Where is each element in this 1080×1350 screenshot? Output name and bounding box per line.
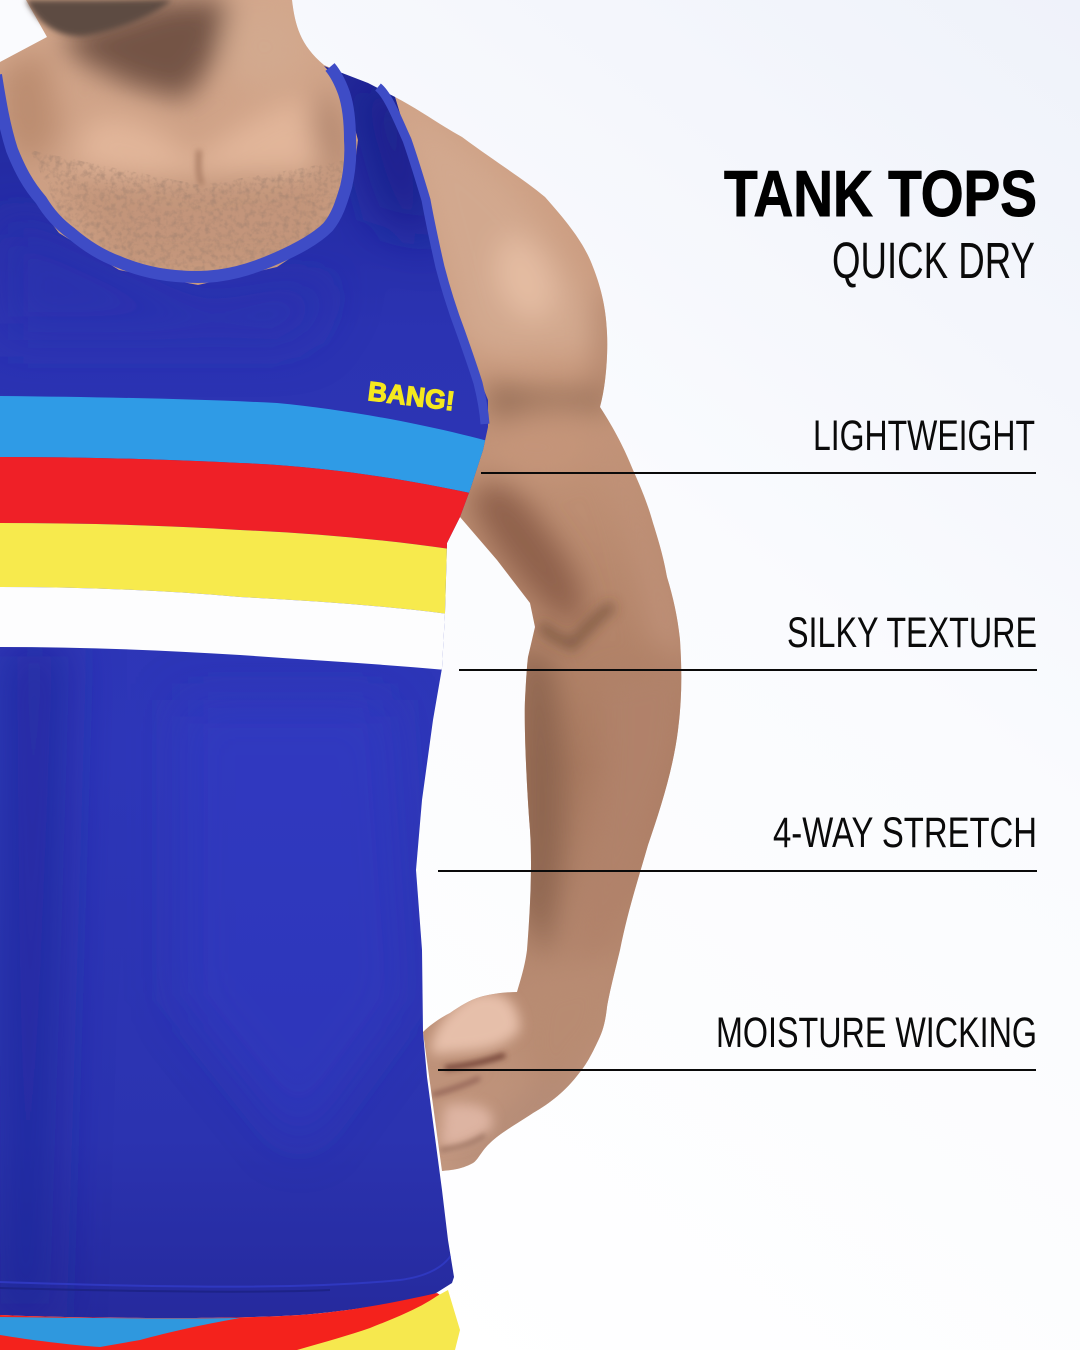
figure: man wearing tank top [0, 0, 700, 1350]
stripe: white [0, 587, 448, 670]
hem stitching [0, 1254, 452, 1287]
stripe: yellow [0, 523, 450, 614]
tank top body [0, 50, 520, 1330]
logo: BANG!: BANG! [366, 376, 456, 417]
skin: neck, chest, shoulder and arm [0, 0, 700, 1180]
beard [26, 0, 172, 36]
shorts [0, 1290, 460, 1350]
stripe: sky blue [0, 396, 495, 493]
stripe: red [0, 457, 470, 549]
strap trim [378, 87, 485, 424]
chest hair [32, 151, 344, 271]
neck trim [0, 67, 350, 277]
